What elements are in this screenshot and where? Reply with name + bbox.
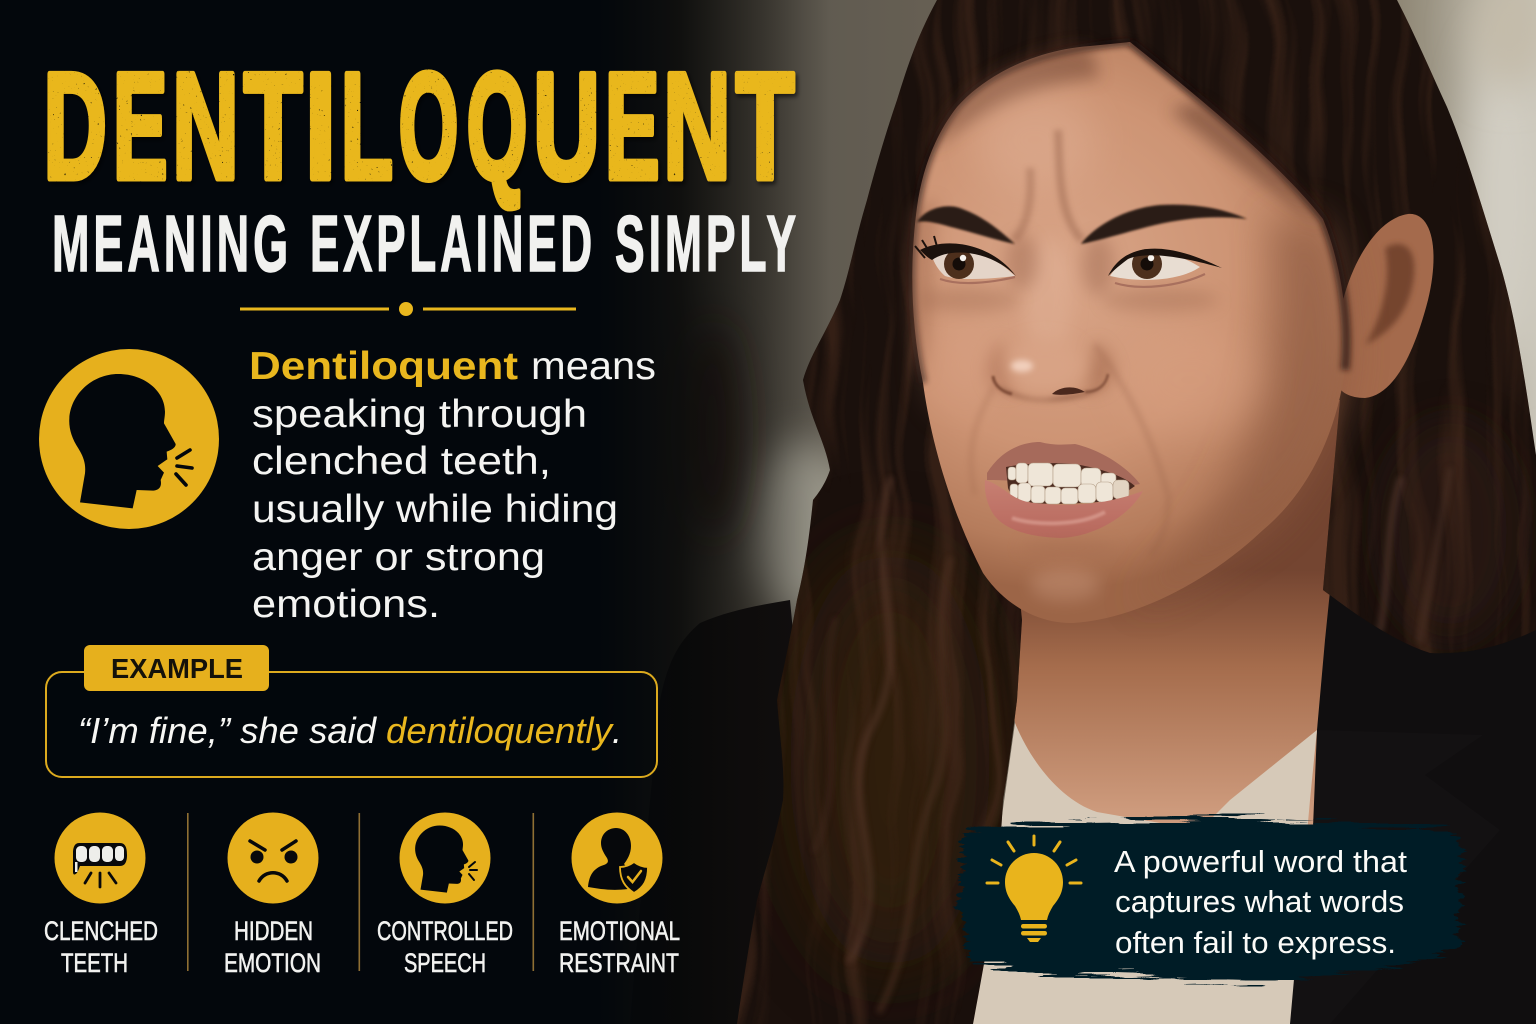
definition text: anger or strong <box>252 536 545 579</box>
subtitle <box>52 199 800 288</box>
ear <box>1338 214 1434 398</box>
title: T <box>736 42 795 212</box>
callout: brush stroke with quote <box>958 818 1462 982</box>
label: hidden emotion: EMOTION <box>224 948 321 978</box>
label: clenched teeth: TEETH <box>61 948 128 978</box>
label: emotional restraint: RESTRAINT <box>559 948 679 978</box>
left dark fade <box>0 0 830 1024</box>
title: Q <box>466 42 528 212</box>
title: E <box>605 42 660 212</box>
example tag: EXAMPLE <box>111 653 243 684</box>
definition text: means <box>531 345 656 388</box>
label: emotional restraint <box>559 916 680 978</box>
face <box>912 42 1346 623</box>
left eye <box>915 236 1016 283</box>
icon: emotional restraint person with shield <box>572 812 662 904</box>
label: controlled speech: SPEECH <box>404 948 486 978</box>
blouse <box>972 723 1317 1024</box>
callout text: captures what words <box>1115 884 1404 919</box>
example box <box>46 645 657 777</box>
example sentence: . <box>612 710 622 751</box>
icon row dividers <box>187 813 534 971</box>
divider <box>240 302 576 316</box>
example sentence: dentiloquently <box>386 710 614 751</box>
title: D <box>43 42 107 212</box>
definition text: emotions. <box>252 583 440 626</box>
title: U <box>533 42 600 212</box>
label: hidden emotion: HIDDEN <box>234 916 313 946</box>
icon: controlled speech head <box>400 812 490 904</box>
title: L <box>340 42 393 212</box>
example sentence: “I’m fine,” she said <box>78 710 377 751</box>
title: O <box>398 42 458 212</box>
chin shadow <box>1020 540 1116 556</box>
callout text <box>1114 844 1407 960</box>
label: hidden emotion <box>224 916 321 978</box>
title <box>43 42 795 212</box>
title: T <box>244 42 303 212</box>
subtitle: SIMPLY <box>615 199 800 288</box>
teeth <box>1008 463 1129 504</box>
callout text: A powerful word that <box>1114 844 1407 879</box>
eyebrows <box>917 205 1247 244</box>
icon: clenched teeth <box>54 812 146 904</box>
icon: light bulb <box>987 836 1081 942</box>
label: controlled speech <box>377 916 513 978</box>
label: emotional restraint: EMOTIONAL <box>559 916 680 946</box>
callout text: often fail to express. <box>1115 925 1396 960</box>
definition text: Dentiloquent <box>249 345 518 388</box>
right eye <box>1108 249 1222 287</box>
label: clenched teeth: CLENCHED <box>44 916 158 946</box>
subtitle: EXPLAINED <box>310 199 596 288</box>
icon: speaking head <box>39 349 219 529</box>
subtitle: MEANING <box>52 199 292 288</box>
icon: hidden emotion angry face <box>228 812 318 904</box>
example tag <box>84 645 269 691</box>
definition text: clenched teeth, <box>252 440 551 483</box>
title: N <box>663 42 731 212</box>
label: controlled speech: CONTROLLED <box>377 916 513 946</box>
title: I <box>304 42 336 212</box>
label: clenched teeth <box>44 916 158 978</box>
definition text <box>249 345 656 626</box>
left blazer <box>630 600 830 1024</box>
mouth <box>985 442 1143 538</box>
title: E <box>113 42 168 212</box>
hair mass <box>700 0 1536 1024</box>
face shading <box>912 42 1347 607</box>
example sentence <box>78 710 622 751</box>
neck and chest <box>990 395 1350 900</box>
nose <box>987 339 1114 401</box>
definition text: speaking through <box>252 393 587 436</box>
definition text: usually while hiding <box>252 488 618 531</box>
title: N <box>172 42 239 212</box>
right blazer <box>1285 585 1536 1024</box>
blazer lapel right <box>1285 730 1500 1024</box>
